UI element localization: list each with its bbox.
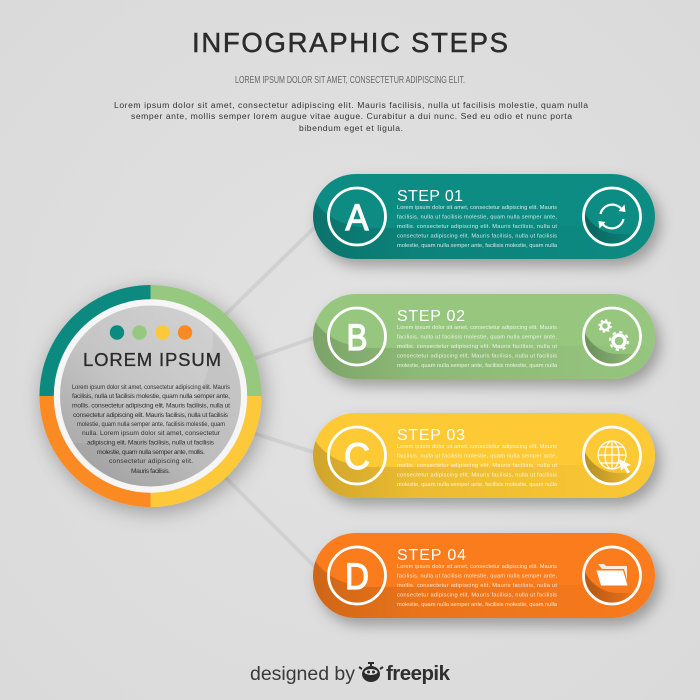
icon: gears — [583, 308, 641, 369]
step text: molestie, quam nulla semper ante, facilisis molestie, quam nulla — [397, 363, 558, 369]
body text: Mauris facilisis. — [131, 468, 170, 475]
step heading: STEP 04 — [397, 547, 466, 564]
step text — [397, 325, 558, 369]
pill shading — [313, 322, 524, 379]
step text: consectetur adipiscing elit. Mauris facilisis, nulla ut facilisis — [397, 354, 557, 360]
step heading: STEP 02 — [397, 308, 465, 325]
step text: mollis. consectetur adipiscing elit. Mauris facilisis, nulla ut — [397, 463, 557, 469]
step text: Lorem ipsum dolor sit amet, consectetur adipiscing elit. Mauris — [397, 205, 557, 211]
body text: facilisis, nulla ut facilisis molestie, quam nulla semper ante, — [72, 393, 230, 400]
connector lines — [222, 226, 318, 570]
step text: facilisis, nulla ut facilisis molestie, quam nulla semper ante, — [397, 574, 557, 580]
white inner ring — [54, 299, 247, 493]
grey disc — [60, 306, 241, 486]
step heading: STEP 03 — [397, 427, 465, 444]
intro paragraph: Lorem ipsum dolor sit amet, consectetur adipiscing elit. Mauris facilisis, nulla ut facilisis molestie, quam nulla — [114, 100, 588, 110]
icon: globe with cursor — [583, 427, 641, 488]
body text: Lorem ipsum dolor sit amet, consectetur adipiscing elit. Mauris — [72, 384, 231, 391]
panel: step 04 — [313, 533, 655, 618]
step heading: STEP 01 — [397, 188, 463, 205]
step text: Lorem ipsum dolor sit amet, consectetur adipiscing elit. Mauris — [397, 325, 557, 331]
badge: letter A: A — [346, 197, 369, 238]
step text: facilisis, nulla ut facilisis molestie, quam nulla semper ante, — [397, 454, 557, 460]
panel: central circle — [40, 285, 262, 507]
footer: designed by freepik: designed by — [250, 663, 355, 685]
footer: designed by freepik — [250, 662, 451, 685]
heading: LOREM IPSUM — [83, 349, 221, 370]
step text: facilisis, nulla ut facilisis molestie, quam nulla semper ante, — [397, 214, 557, 220]
icon: refresh — [583, 188, 641, 249]
icon: folder — [583, 547, 641, 608]
intro paragraph: semper ante, mollis semper lorem augue vitae augue. Curabitur a dui nunc. Sed eu odio et nunc porta — [131, 111, 572, 121]
pill body — [313, 174, 655, 259]
subtitle: LOREM IPSUM DOLOR SIT AMET, CONSECTETUR ADIPISCING ELIT. — [235, 74, 465, 86]
body text: molestie, quam nulla semper ante, facilisis molestie, quam — [77, 421, 225, 428]
badge: letter C: C — [344, 436, 370, 477]
step text: molestie, quam nulla semper ante, facilisis molestie, quam nulla — [397, 482, 558, 488]
step text: mollis. consectetur adipiscing elit. Mauris facilisis, nulla ut — [397, 583, 557, 589]
body text: nulla. Lorem ipsum dolor sit amet, consectetur — [82, 430, 221, 437]
step text: consectetur adipiscing elit. Mauris facilisis, nulla ut facilisis — [397, 472, 557, 478]
intro paragraph: bibendum eget et ligula. — [299, 123, 403, 133]
badge: letter B: B — [346, 317, 368, 358]
step text: consectetur adipiscing elit. Mauris facilisis, nulla ut facilisis — [397, 592, 557, 598]
badge: letter D — [328, 547, 386, 604]
pill body — [313, 294, 655, 379]
intro paragraph — [114, 100, 588, 133]
title: INFOGRAPHIC STEPS — [192, 27, 508, 58]
step text: Lorem ipsum dolor sit amet, consectetur adipiscing elit. Mauris — [397, 564, 557, 570]
step text — [397, 564, 558, 608]
pill shading — [313, 441, 561, 498]
body text: consectetur adipiscing elit. Mauris facilisis, nulla ut facilisis — [73, 412, 229, 419]
badge: letter A — [328, 188, 386, 245]
pill body — [313, 413, 655, 498]
badge: letter D: D — [345, 556, 369, 597]
panel: step 02 — [313, 294, 655, 379]
outer colour ring — [40, 285, 262, 507]
body text — [72, 384, 231, 475]
step text: molestie, quam nulla semper ante, facilisis molestie, quam nulla — [397, 602, 558, 608]
step text: consectetur adipiscing elit. Mauris facilisis, nulla ut facilisis — [397, 234, 557, 240]
step text: Lorem ipsum dolor sit amet, consectetur adipiscing elit. Mauris — [397, 444, 557, 450]
panel: step 03 — [313, 413, 655, 498]
body text: mollis. consectetur adipiscing elit. Mauris facilisis, nulla ut — [72, 402, 230, 410]
step text — [397, 205, 558, 249]
icon: freepik mascot — [359, 662, 383, 682]
step text: mollis. consectetur adipiscing elit. Mauris facilisis, nulla ut — [397, 344, 557, 350]
step text: facilisis, nulla ut facilisis molestie, quam nulla semper ante, — [397, 334, 557, 340]
pill shading — [313, 561, 560, 618]
disc highlight swoosh — [72, 332, 241, 486]
badge: letter B — [328, 308, 386, 365]
step text — [397, 444, 558, 488]
body text: consectetur adipiscing elit. — [109, 458, 193, 465]
step text: mollis. consectetur adipiscing elit. Mauris facilisis, nulla ut — [397, 224, 557, 230]
body text: molestie, quam nulla semper ante, mollis. — [97, 449, 205, 456]
footer: designed by freepik: freepik — [386, 662, 451, 685]
body text: adipiscing elit. Mauris facilisis, nulla ut facilisis — [87, 440, 215, 446]
step text: molestie, quam nulla semper ante, facilisis molestie, quam nulla — [397, 243, 558, 249]
indicator dots — [110, 325, 192, 340]
pill body — [313, 533, 655, 618]
pill shading — [313, 202, 452, 259]
panel: step 01 — [313, 174, 655, 259]
badge: letter C — [328, 427, 386, 484]
